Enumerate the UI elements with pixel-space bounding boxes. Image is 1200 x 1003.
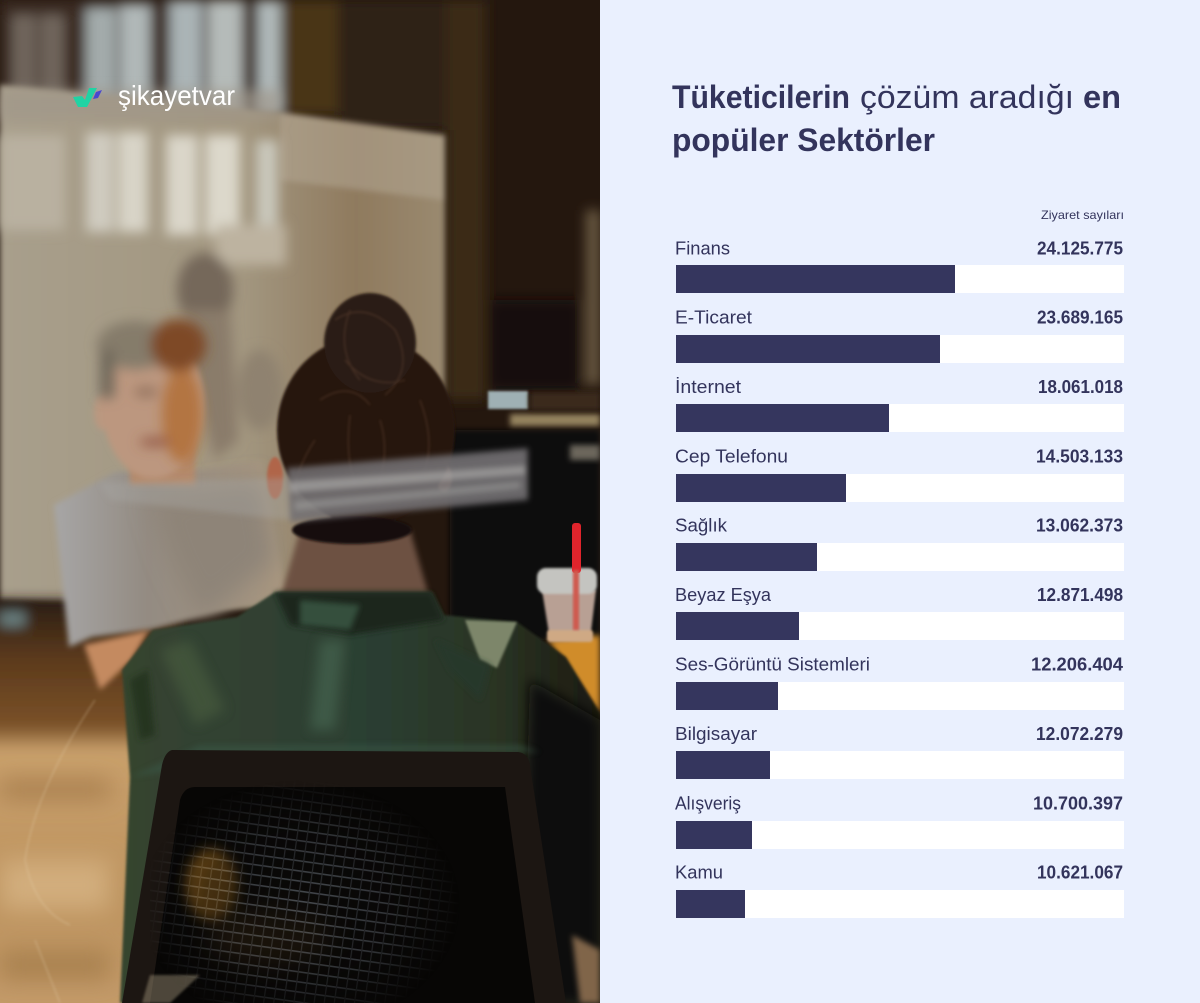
man's head	[94, 363, 206, 478]
row: Ses-Görüntü Sistemleri: Ses-Görüntü Sistemleri	[675, 655, 870, 675]
row: Finans: Finans	[675, 239, 730, 259]
row: İnternet: 18.061.018	[1038, 377, 1123, 397]
row: Sağlık	[675, 516, 1124, 571]
title	[672, 79, 1121, 158]
right background objects	[450, 391, 600, 715]
row: Finans	[675, 239, 1124, 293]
row: Sağlık: Sağlık	[675, 516, 728, 536]
green jacket	[120, 592, 600, 1003]
row: İnternet	[675, 377, 1124, 432]
row: E-Ticaret	[675, 308, 1124, 363]
man's arm	[84, 630, 149, 690]
row: Ses-Görüntü Sistemleri	[675, 655, 1124, 710]
floor light bands	[0, 780, 110, 980]
background walls and windows	[0, 0, 600, 400]
woman's hair and neck	[267, 293, 455, 600]
row: Cep Telefonu: Cep Telefonu	[675, 447, 788, 467]
row: Beyaz Eşya: 12.871.498	[1037, 585, 1123, 605]
row: Finans: 24.125.775	[1037, 239, 1123, 259]
title: popüler Sektörler	[672, 122, 935, 158]
panel: chart background	[600, 0, 1200, 1003]
row: Beyaz Eşya	[675, 585, 1124, 640]
man's shirt	[54, 460, 285, 647]
title: Tüketicilerin	[672, 79, 850, 115]
row: Alışveriş: 10.700.397	[1033, 794, 1123, 814]
row: Cep Telefonu	[675, 447, 1124, 502]
man's face shading	[97, 319, 206, 463]
row: E-Ticaret: E-Ticaret	[675, 308, 752, 328]
row: Ses-Görüntü Sistemleri: 12.206.404	[1031, 655, 1123, 675]
row: Sağlık: 13.062.373	[1036, 516, 1123, 536]
logo: şikayetvar	[73, 85, 235, 111]
title: çözüm aradığı	[860, 79, 1074, 115]
row: Bilgisayar	[675, 724, 1124, 779]
row: Beyaz Eşya: Beyaz Eşya	[675, 585, 772, 605]
row: Alışveriş	[675, 794, 1124, 849]
row: Kamu: 10.621.067	[1037, 863, 1123, 883]
ghost reflection on floor	[25, 700, 95, 1003]
whiteboard reflection	[0, 85, 445, 610]
glare streak	[100, 448, 528, 522]
man's neck	[128, 454, 196, 486]
black mesh chair	[122, 750, 600, 1003]
floor	[0, 600, 180, 1003]
man blurred	[54, 319, 285, 690]
row: İnternet: İnternet	[675, 377, 741, 397]
row: Kamu: Kamu	[675, 863, 723, 883]
row: Alışveriş: Alışveriş	[675, 794, 741, 814]
logo: şikayetvar: şikayetvar	[118, 80, 235, 111]
row: E-Ticaret: 23.689.165	[1037, 308, 1123, 328]
row: Kamu	[675, 863, 1124, 918]
title: en	[1083, 79, 1121, 115]
row: Bilgisayar: 12.072.279	[1036, 724, 1123, 744]
photo: two people in a meeting	[0, 0, 600, 1003]
cup and red straw	[537, 523, 597, 642]
axis caption: Ziyaret sayıları	[1041, 208, 1124, 222]
row: Bilgisayar: Bilgisayar	[675, 724, 757, 744]
row: Cep Telefonu: 14.503.133	[1036, 447, 1123, 467]
